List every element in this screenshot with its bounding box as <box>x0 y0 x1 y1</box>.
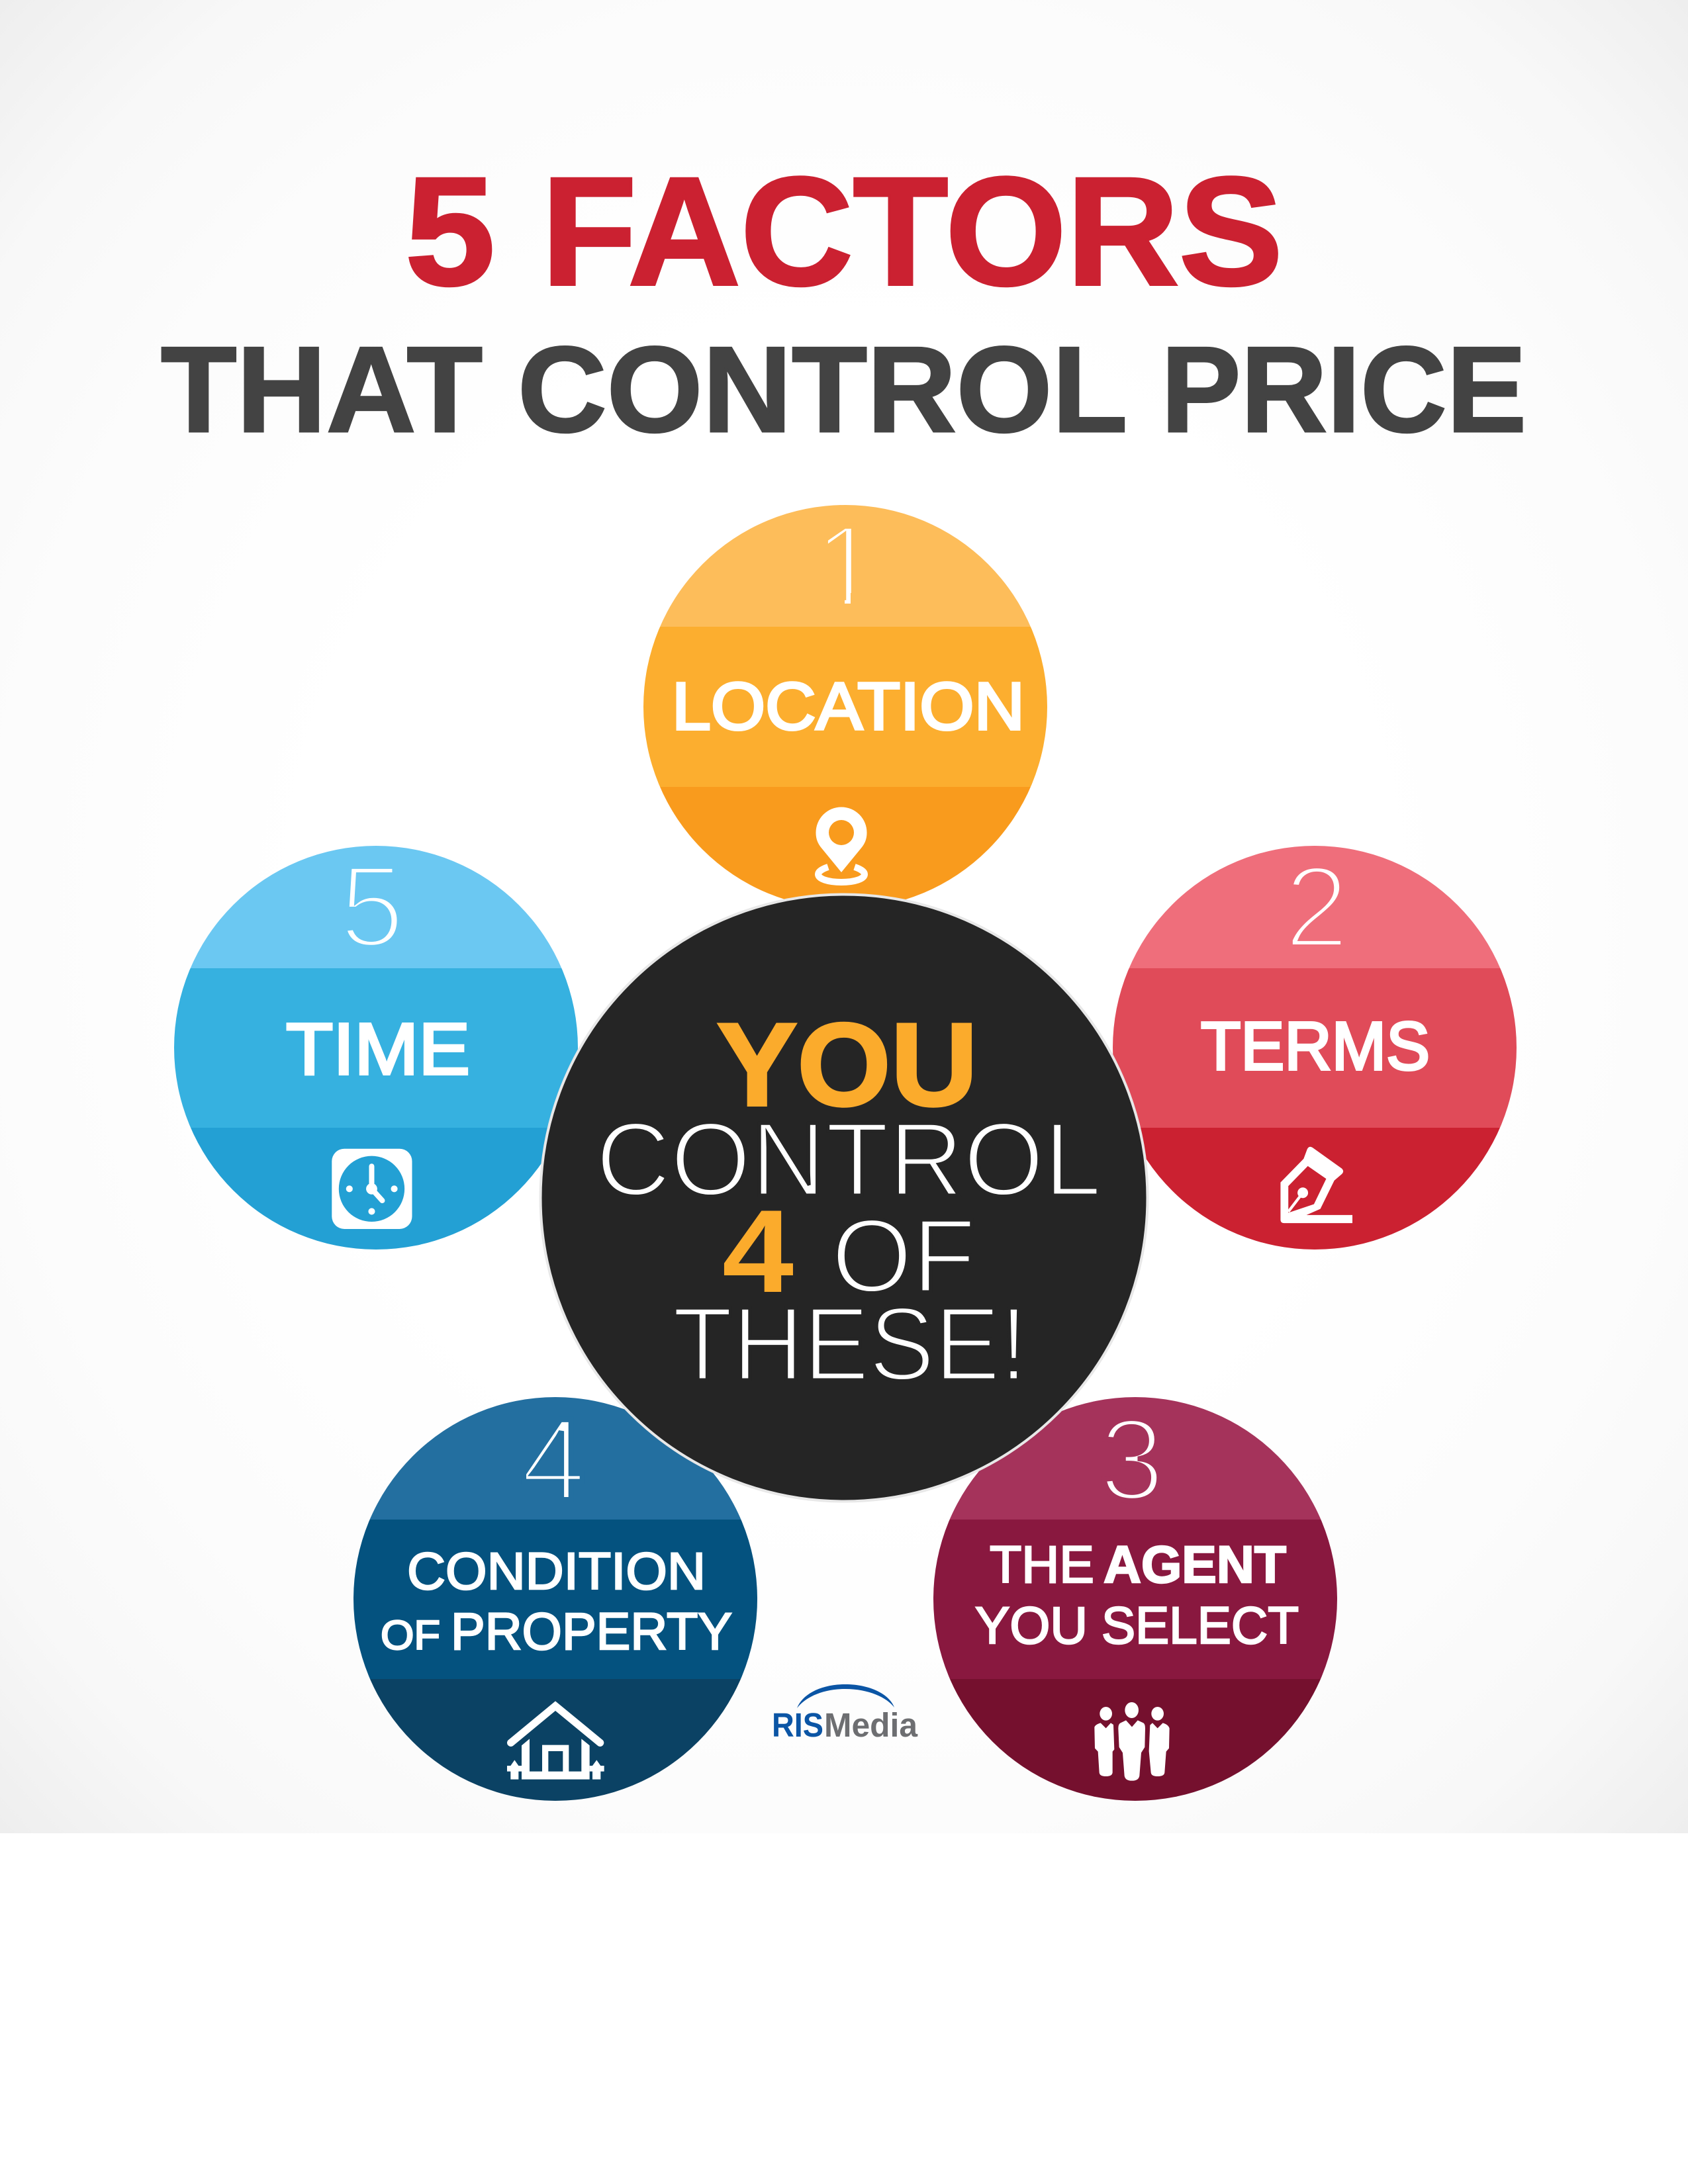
panel: factor 3 the agent you select <box>930 1395 1340 1805</box>
label: of property: OF <box>381 1613 440 1659</box>
logo wordmark: Media <box>824 1706 918 1744</box>
text: control: CONTROL <box>596 1101 1102 1218</box>
number 2: 2 <box>1284 842 1349 972</box>
label: of property: PROPERTY <box>451 1602 732 1661</box>
panel: center you control 4 of these <box>540 895 1148 1501</box>
heading: that control price: CONTROL <box>518 321 1125 457</box>
heading: that control price: PRICE <box>1161 321 1526 457</box>
icon: three people <box>1094 1702 1170 1781</box>
text: you: YOU <box>717 999 978 1130</box>
panel: factor 2 terms <box>1109 842 1519 1253</box>
label: time: TIME <box>286 1009 470 1090</box>
icon: fountain pen <box>1280 1147 1352 1223</box>
text: these!: THESE! <box>673 1286 1027 1402</box>
number 1 <box>788 502 897 631</box>
panel: factor 4 condition of property <box>351 1395 761 1805</box>
text: 4 of: OF <box>831 1198 976 1314</box>
label: you select: SELECT <box>1102 1596 1299 1655</box>
label: the agent: THE <box>990 1535 1094 1594</box>
number 5: 5 <box>340 842 404 972</box>
panel: factor 5 time <box>171 842 581 1253</box>
icon: house <box>507 1706 604 1780</box>
icon: map pin <box>816 807 867 882</box>
heading: 5 factors: 5 <box>405 146 495 318</box>
icon: clock <box>332 1149 412 1229</box>
number 1: 1 <box>814 502 879 631</box>
text: 4 of: 4 <box>722 1185 794 1317</box>
heading: 5 factors: FACTORS <box>541 146 1283 318</box>
logo: RISMedia <box>772 1684 918 1744</box>
label: location: LOCATION <box>672 670 1025 744</box>
number 3: 3 <box>1100 1395 1164 1525</box>
label: terms: TERMS <box>1201 1008 1430 1084</box>
label: condition: CONDITION <box>407 1541 706 1600</box>
logo arc <box>797 1684 894 1708</box>
label: the agent: AGENT <box>1103 1535 1286 1594</box>
title <box>161 146 1526 457</box>
logo wordmark: RIS <box>772 1706 823 1744</box>
label: you select: YOU <box>975 1596 1088 1655</box>
panel: factor 1 location <box>642 502 1049 913</box>
number 4: 4 <box>521 1395 586 1525</box>
heading: that control price: THAT <box>161 321 483 457</box>
